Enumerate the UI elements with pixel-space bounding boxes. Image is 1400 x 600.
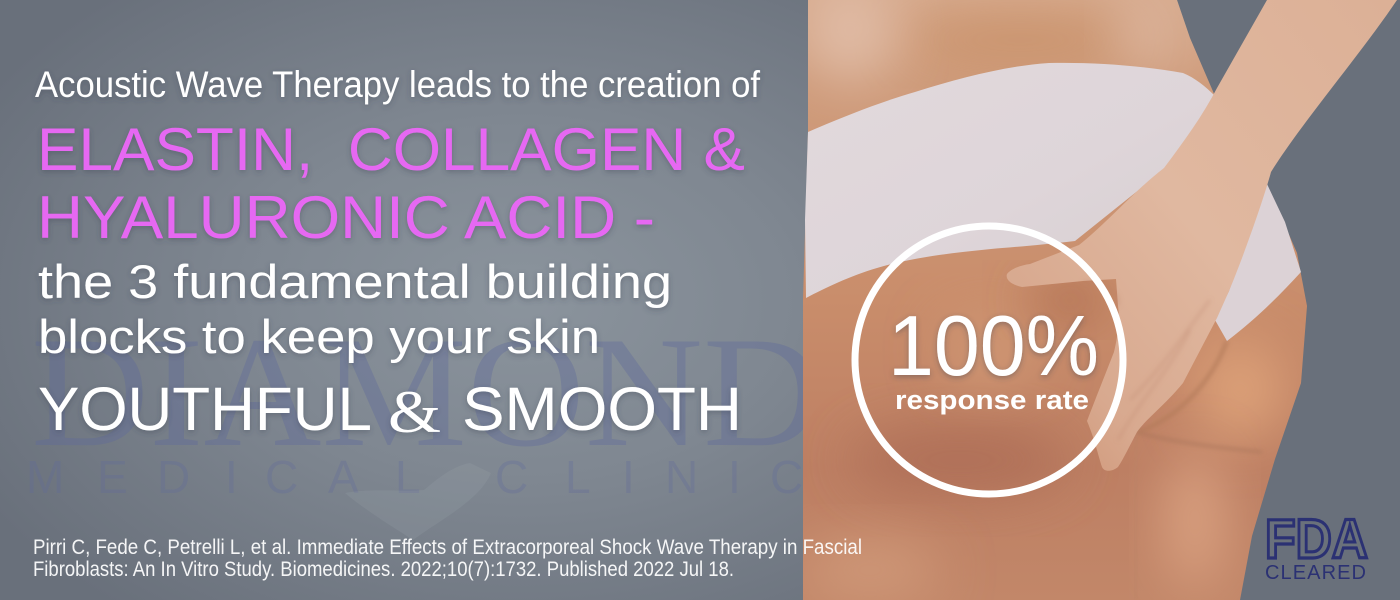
intro sentence: Acoustic Wave Therapy leads to the creation of	[35, 64, 761, 105]
body line 2: blocks to keep your skin	[38, 310, 600, 363]
fold under hand	[1170, 342, 1228, 414]
citation line 2: Fibroblasts: An In Vitro Study. Biomedicines. 2022;10(7):1732. Published 2022 Jul 18.	[33, 558, 734, 581]
underwear right side	[1215, 172, 1301, 341]
callout: 100% response rate	[855, 226, 1123, 494]
arm and hand	[1007, 0, 1397, 471]
figure: body photo illustration	[800, 0, 1397, 600]
watermark: DIAMOND: DIAMOND	[31, 305, 821, 480]
torso, hip and leg	[803, 0, 1307, 600]
cleared label: CLEARED	[1265, 562, 1366, 584]
FDA letters: FDA	[1265, 507, 1368, 570]
body shading	[800, 0, 1285, 600]
inner leg line	[1135, 432, 1137, 600]
heading line 1: ELASTIN, COLLAGEN &	[37, 116, 745, 183]
closing line: youthful and smooth	[38, 375, 742, 445]
underwear	[805, 63, 1215, 298]
body text	[38, 255, 672, 363]
watermark: clinic logo	[26, 305, 821, 540]
word: smooth: SMOOTH	[462, 375, 742, 443]
watermark: MEDICAL CLINIC: MEDICAL CLINIC	[26, 451, 803, 503]
body line 1: the 3 fundamental building	[38, 255, 672, 308]
heading line 2: HYALURONIC ACID -	[37, 184, 655, 251]
icon: FDA cleared badge	[1265, 507, 1368, 584]
watermark: heart mark	[345, 463, 491, 540]
highlighted heading	[37, 116, 745, 251]
word: youthful: YOUTHFUL	[38, 375, 372, 443]
crease shadow	[1144, 434, 1259, 453]
callout ring	[855, 226, 1123, 494]
citation	[33, 536, 862, 581]
finger creases	[1083, 281, 1210, 440]
citation line 1: Pirri C, Fede C, Petrelli L, et al. Immediate Effects of Extracorporeal Shock Wave Therapy in Fascial	[33, 536, 862, 559]
ampersand: &	[388, 379, 441, 445]
statistic label: response rate	[895, 385, 1089, 415]
statistic: 100%	[888, 299, 1099, 394]
